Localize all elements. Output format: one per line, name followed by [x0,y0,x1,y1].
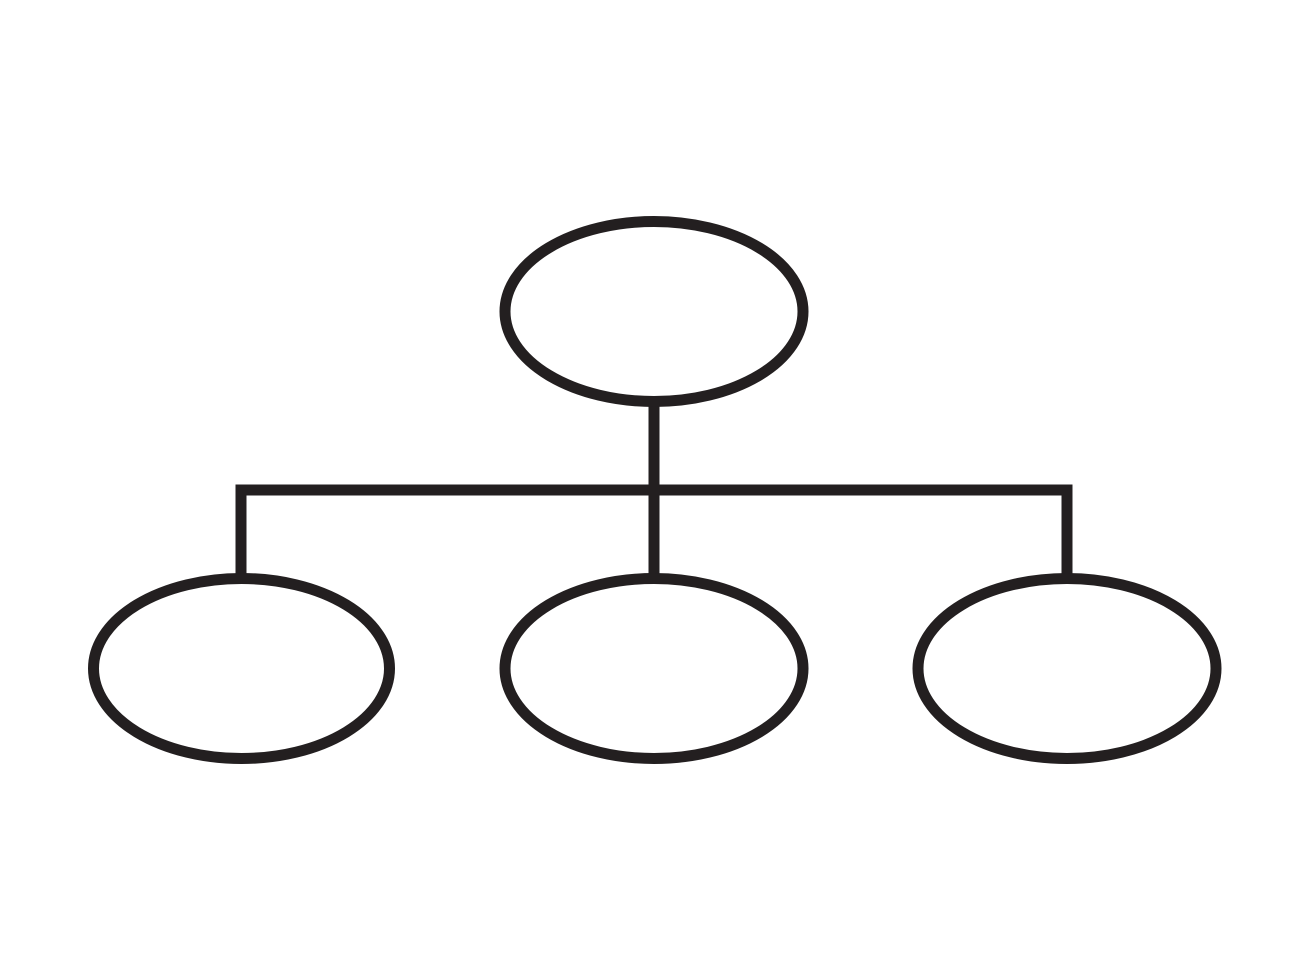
top node [505,222,803,402]
bottom node: right [918,578,1216,758]
bottom node: left [94,578,390,758]
connector lines [241,402,1067,578]
bottom node: middle [505,578,803,758]
